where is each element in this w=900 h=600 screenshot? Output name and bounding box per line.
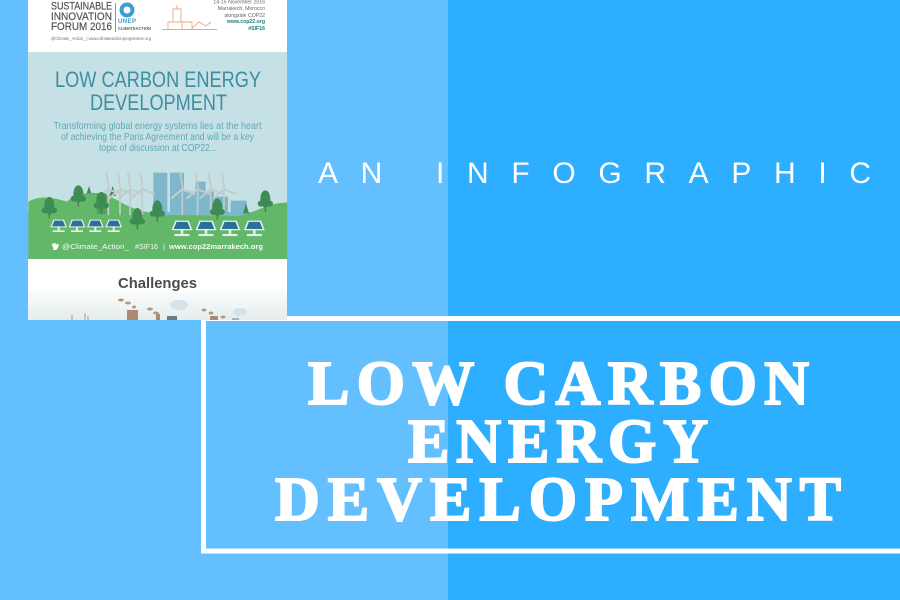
subtitle: an infographic: AN INFOGRAPHIC: [318, 157, 871, 190]
poster intro text: of achieving the Paris Agreement and will be a key: [61, 132, 254, 143]
poster title: DEVELOPMENT: [90, 90, 227, 115]
event details: [213, 0, 265, 32]
poster social line: @Climate_Action_: [62, 242, 130, 251]
poster intro text: [54, 121, 262, 154]
poster title: [55, 67, 261, 115]
forum name: SUSTAINABLE: [51, 0, 112, 12]
event details: alongside COP22: [224, 13, 265, 19]
icon: UNEP logo: UNEP: [118, 19, 136, 25]
poster social line: |: [163, 242, 165, 251]
background: left light panel: [0, 0, 448, 600]
icon: UNEP logo: CLIMATEACTION: [118, 26, 152, 31]
poster thumbnail: [28, 0, 287, 320]
poster social line: #SIF16: [135, 242, 158, 251]
event details: www.cop22.org: [226, 19, 265, 25]
forum name: [51, 0, 112, 33]
poster intro text: Transforming global energy systems lies at the heart: [54, 121, 262, 132]
poster hero panel: [28, 52, 287, 212]
main title: DEVELOPMENT: [275, 466, 841, 534]
conifers: [87, 186, 249, 213]
forum name: INNOVATION: [51, 11, 112, 23]
poster title: LOW CARBON ENERGY: [55, 67, 261, 92]
challenges heading: Challenges: [118, 275, 197, 292]
poster links: @Climate_Action_ | www.climateactionprogramme.org: [51, 36, 152, 41]
event details: Marrakech, Morocco: [218, 6, 265, 12]
landscape illustration: [28, 173, 287, 259]
main title: LOW CARBON: [308, 350, 809, 418]
main title: ENERGY: [408, 408, 708, 476]
icon: Marrakech skyline: [162, 5, 217, 30]
background: right dark panel: [448, 0, 900, 600]
wind turbines: [97, 173, 121, 215]
poster social line: [52, 242, 263, 251]
poster social line: www.cop22marrakech.org: [168, 242, 263, 251]
title frame: [201, 316, 900, 554]
city buildings: [153, 173, 247, 217]
solar panels: [50, 220, 67, 232]
poster intro text: topic of discussion at COP22...: [99, 143, 217, 154]
forum name: FORUM 2016: [51, 21, 112, 33]
poster header: [28, 0, 287, 52]
challenges section: [28, 259, 287, 320]
trees: [42, 197, 57, 218]
icon: UNEP logo: [118, 2, 152, 31]
main title: [275, 350, 841, 534]
green hills: [28, 193, 287, 259]
factory illustration: [72, 298, 247, 320]
event details: #SIF16: [248, 26, 265, 32]
icon: twitter bird: [52, 243, 59, 250]
